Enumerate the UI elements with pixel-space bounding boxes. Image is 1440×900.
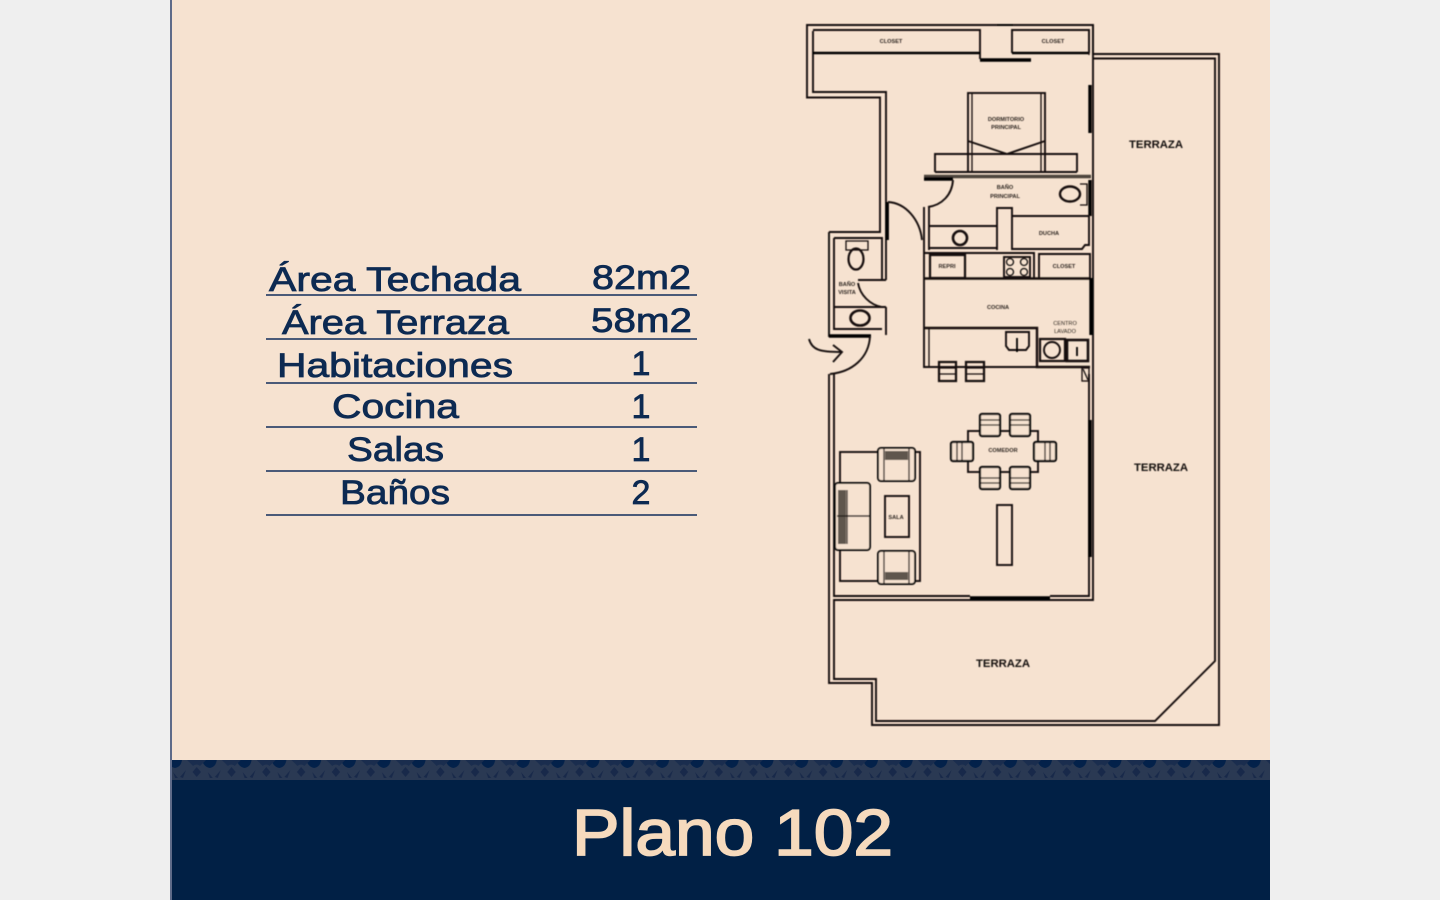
living room furniture: SALA xyxy=(888,515,904,521)
kitchen: CENTRO xyxy=(1053,321,1077,327)
title: Plano 102 xyxy=(572,796,893,869)
row: cocina: 1 xyxy=(632,388,650,426)
row: salas: 1 xyxy=(632,431,650,469)
row: habitaciones xyxy=(266,345,697,385)
kitchen: LAVADO xyxy=(1054,329,1077,335)
row: habitaciones: 1 xyxy=(632,345,650,383)
terrace labels: TERRAZA xyxy=(1134,462,1188,474)
main bathroom: PRINCIPAL xyxy=(990,194,1020,200)
terrace labels: TERRAZA xyxy=(976,658,1030,670)
row: salas xyxy=(266,431,697,471)
main bathroom: BAÑO xyxy=(997,184,1014,191)
bedroom with bed: PRINCIPAL xyxy=(991,125,1021,131)
row: área techada: 82m2 xyxy=(592,259,691,297)
guest bathroom: BAÑO xyxy=(839,281,856,288)
row: cocina xyxy=(266,388,697,427)
row: área terraza xyxy=(266,302,697,342)
row: área techada: Área Techada xyxy=(269,261,521,299)
row: área terraza: Área Terraza xyxy=(282,304,509,342)
dining table and chairs: COMEDOR xyxy=(988,448,1018,454)
footer band xyxy=(172,760,1270,900)
main bathroom xyxy=(929,180,1090,250)
kitchen xyxy=(924,253,1091,381)
row: área terraza: 58m2 xyxy=(591,302,692,340)
kitchen: COCINA xyxy=(987,305,1009,311)
entry door and arrow xyxy=(809,336,870,374)
closets xyxy=(813,25,1089,60)
specifications table xyxy=(266,259,697,515)
closets: CLOSET xyxy=(880,39,903,45)
row: baños: Baños xyxy=(340,474,450,512)
floor plan xyxy=(807,25,1219,725)
row: cocina: Cocina xyxy=(332,388,459,426)
guest bathroom xyxy=(829,241,886,336)
living room furniture xyxy=(835,448,920,584)
kitchen: CLOSET xyxy=(1053,264,1076,270)
terrace labels xyxy=(976,139,1188,670)
dining table and chairs xyxy=(951,414,1056,489)
partition wall and doors xyxy=(887,176,1091,367)
row: salas: Salas xyxy=(347,431,444,469)
row: habitaciones: Habitaciones xyxy=(277,347,513,385)
kitchen: REPRI xyxy=(938,264,956,270)
row: baños xyxy=(266,474,697,515)
guest bathroom: VISITA xyxy=(838,290,856,296)
page panel xyxy=(172,0,1270,760)
ornamental pattern strip xyxy=(172,760,1270,780)
bedroom with bed xyxy=(935,85,1090,172)
left edge line xyxy=(170,0,172,900)
row: baños: 2 xyxy=(632,474,650,512)
terrace labels: TERRAZA xyxy=(1129,139,1183,151)
main bathroom: DUCHA xyxy=(1039,231,1059,237)
closets: CLOSET xyxy=(1042,39,1065,45)
kitchen island xyxy=(997,505,1012,565)
row: área techada xyxy=(266,259,697,299)
bedroom with bed: DORMITORIO xyxy=(988,117,1025,123)
exterior walls xyxy=(807,25,1219,725)
